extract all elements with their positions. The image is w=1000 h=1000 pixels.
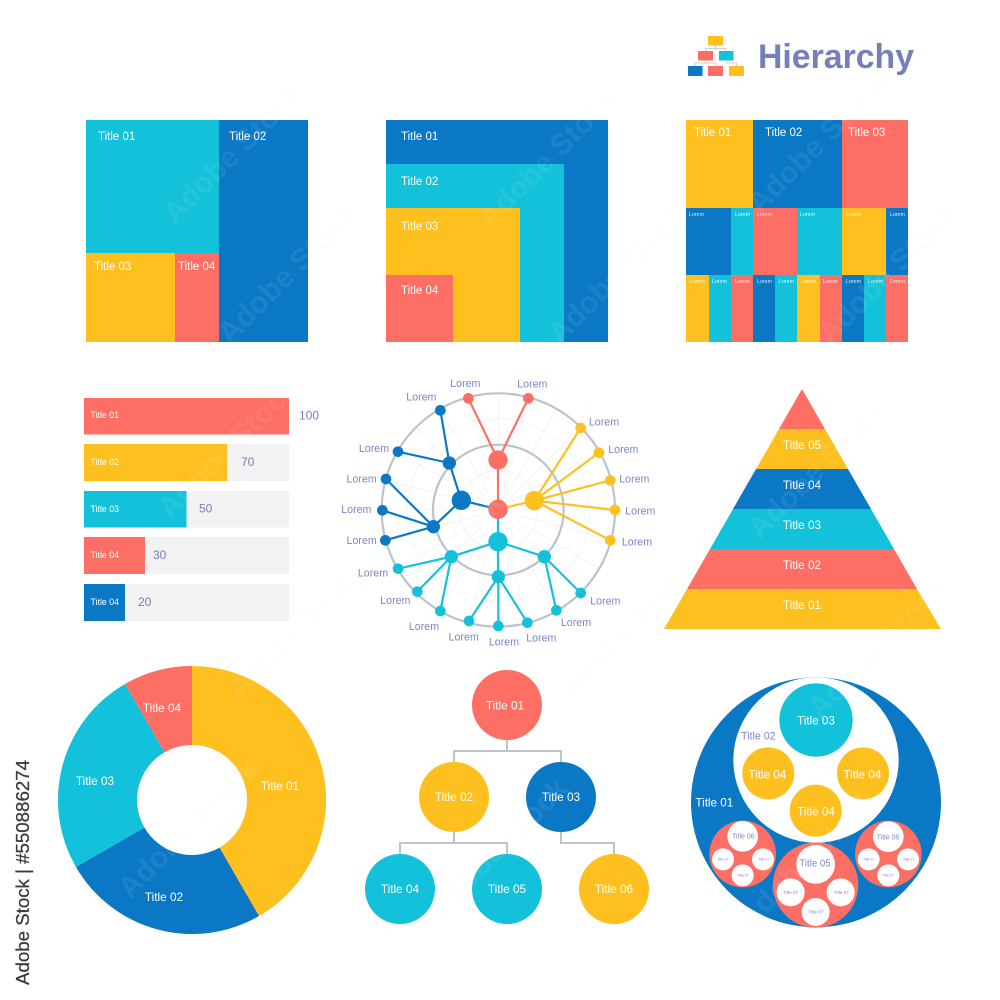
radial labels: Lorem bbox=[590, 596, 621, 608]
panel: nested square treemap: Title 01 bbox=[401, 131, 438, 143]
panel: three-level treemap: Title 03 bbox=[848, 127, 885, 139]
panel: nested square treemap: Title 04 bbox=[401, 285, 439, 297]
radial labels bbox=[341, 378, 656, 648]
pyramid chart: Title 01 bbox=[783, 598, 821, 612]
watermark pattern: Adobe Stock bbox=[472, 82, 625, 235]
circle packing chart: Title 07 bbox=[717, 857, 729, 861]
panel: treemap 1: Title 01 bbox=[98, 131, 135, 143]
root node bbox=[488, 500, 508, 519]
watermark pattern: Adobe Stock bbox=[112, 752, 265, 905]
panel: treemap 1: Title 02 bbox=[229, 131, 266, 143]
watermark pattern: Adobe Stock bbox=[157, 77, 310, 230]
watermark pattern: Adobe Stock bbox=[802, 572, 955, 725]
panel: three-level treemap: Lorem bbox=[823, 279, 839, 285]
circle packing chart: Title 05 bbox=[799, 859, 831, 870]
watermark pattern: Adobe Stock bbox=[452, 392, 605, 545]
circle packing chart: Title 07 bbox=[758, 857, 769, 861]
panel: three-level treemap: Lorem bbox=[712, 279, 728, 285]
radial labels: Lorem bbox=[449, 631, 479, 643]
bar chart: 100 bbox=[299, 408, 319, 422]
panel: nested square treemap bbox=[386, 120, 608, 342]
watermark pattern: Adobe Stock bbox=[552, 552, 705, 705]
panel: three-level treemap: Lorem bbox=[800, 212, 816, 218]
watermark pattern: Adobe Stock bbox=[812, 197, 965, 350]
side credit text: Adobe Stock | #550886274 bbox=[13, 760, 33, 985]
panel: nested square treemap: Title 03 bbox=[401, 221, 438, 233]
bar chart: Title 01 bbox=[90, 410, 119, 420]
radial labels: Lorem bbox=[358, 568, 388, 580]
panel: three-level treemap: Lorem bbox=[735, 212, 751, 218]
circle packing chart: Title 07 bbox=[737, 874, 749, 878]
radial labels: Lorem bbox=[406, 392, 437, 404]
heading text: Hierarchy bbox=[758, 38, 914, 76]
branch: red bbox=[463, 393, 534, 509]
donut chart: Title 03 bbox=[76, 774, 115, 788]
radial labels: Lorem bbox=[619, 473, 650, 485]
circle packing chart: Title 06 bbox=[877, 835, 899, 842]
branch: yellow bbox=[498, 423, 620, 546]
radial labels: Lorem bbox=[347, 473, 377, 485]
circle packing chart: Title 01 bbox=[695, 796, 733, 809]
watermark pattern: Adobe Stock bbox=[152, 372, 305, 525]
tree diagram: Title 05 bbox=[488, 882, 527, 896]
panel: three-level treemap: Lorem bbox=[890, 212, 906, 218]
donut chart: Title 04 bbox=[143, 701, 182, 715]
panel: three-level treemap: Lorem bbox=[846, 279, 862, 285]
pyramid chart: Title 03 bbox=[783, 518, 822, 532]
radial labels: Lorem bbox=[561, 617, 591, 629]
radial labels: Lorem bbox=[608, 444, 639, 456]
watermark pattern: Adobe Stock bbox=[742, 392, 895, 545]
tree diagram: Title 06 bbox=[595, 882, 634, 896]
tree diagram: Title 04 bbox=[381, 882, 420, 896]
circle packing chart: Title 07 bbox=[883, 874, 894, 878]
panel: three-level treemap: Lorem bbox=[757, 279, 773, 285]
bar chart: 70 bbox=[241, 455, 255, 469]
circle packing chart: Title 07 bbox=[808, 909, 824, 914]
panel: three-level treemap: Lorem bbox=[801, 279, 817, 285]
panel: three-level treemap: Lorem bbox=[846, 212, 862, 218]
circle packing chart: Title 06 bbox=[732, 834, 755, 841]
icon: org chart bbox=[688, 36, 744, 76]
tree diagram: Title 02 bbox=[435, 790, 473, 804]
bar chart: Title 02 bbox=[90, 457, 119, 467]
branch: cyan bbox=[393, 509, 586, 631]
pyramid chart bbox=[664, 389, 941, 629]
bar chart: 20 bbox=[138, 595, 152, 609]
donut chart: Title 01 bbox=[261, 779, 299, 793]
radial labels: Lorem bbox=[409, 621, 439, 633]
panel: three-level treemap: Lorem bbox=[757, 212, 773, 218]
bar chart bbox=[84, 398, 319, 621]
panel: three-level treemap: Lorem bbox=[690, 279, 706, 285]
circle packing chart: Title 04 bbox=[797, 805, 835, 818]
radial labels: Lorem bbox=[359, 443, 389, 455]
circle packing chart bbox=[691, 677, 941, 928]
branch: blue bbox=[377, 405, 498, 546]
radial labels: Lorem bbox=[589, 416, 619, 428]
bar chart: 30 bbox=[153, 548, 167, 562]
radial labels: Lorem bbox=[380, 595, 411, 607]
watermark pattern: Adobe Stock bbox=[742, 67, 895, 220]
bar chart: Title 03 bbox=[90, 504, 119, 514]
tree diagram bbox=[365, 670, 649, 924]
radial labels: Lorem bbox=[341, 504, 372, 516]
pyramid chart: Title 02 bbox=[783, 558, 821, 572]
radial labels: Lorem bbox=[622, 537, 652, 549]
panel: treemap 1: Title 03 bbox=[94, 261, 131, 273]
radial labels: Lorem bbox=[625, 505, 656, 517]
radial rings bbox=[382, 393, 615, 627]
panel: three-level treemap: Lorem bbox=[868, 279, 884, 285]
radial labels: Lorem bbox=[517, 379, 548, 391]
circle packing chart: Title 07 bbox=[783, 890, 799, 895]
circle packing chart: Title 04 bbox=[748, 768, 787, 781]
watermark pattern bbox=[112, 67, 965, 935]
bar chart: 50 bbox=[199, 502, 213, 516]
circle packing chart: Title 04 bbox=[843, 768, 882, 781]
circle packing chart: Title 02 bbox=[741, 730, 776, 742]
radial labels: Lorem bbox=[489, 636, 519, 648]
watermark pattern: Adobe Stock bbox=[212, 197, 365, 350]
panel: three-level treemap: Lorem bbox=[689, 212, 705, 218]
panel: nested square treemap: Title 02 bbox=[401, 176, 438, 188]
radial labels: Lorem bbox=[526, 633, 557, 645]
watermark pattern: Adobe Stock bbox=[542, 197, 695, 350]
panel: three-level treemap: Title 02 bbox=[765, 127, 802, 139]
circle packing chart: Title 03 bbox=[797, 714, 835, 727]
panel: three-level treemap: Title 01 bbox=[694, 127, 731, 139]
circle packing chart: Title 07 bbox=[863, 857, 874, 861]
panel: three-level treemap: Lorem bbox=[890, 279, 906, 285]
panel: three-level treemap: Lorem bbox=[735, 279, 751, 285]
pyramid chart: Title 04 bbox=[783, 478, 822, 492]
circle packing chart: Title 07 bbox=[834, 890, 849, 895]
radial grid bbox=[382, 393, 615, 627]
panel: treemap 1: Title 04 bbox=[178, 261, 216, 273]
watermark pattern: Adobe Stock bbox=[422, 772, 575, 925]
watermark pattern: Adobe Stock bbox=[732, 782, 885, 935]
radial labels: Lorem bbox=[347, 535, 377, 547]
bar chart: Title 04 bbox=[90, 597, 119, 607]
circle packing chart: Title 07 bbox=[903, 857, 914, 861]
tree diagram: Title 01 bbox=[486, 698, 524, 712]
tree diagram: Title 03 bbox=[542, 790, 581, 804]
watermark pattern: Adobe Stock bbox=[222, 552, 375, 705]
panel: three-level treemap bbox=[686, 120, 908, 342]
bar chart: Title 04 bbox=[90, 550, 119, 560]
radial tree chart bbox=[341, 378, 656, 648]
donut chart bbox=[58, 666, 326, 934]
logo: hierarchy heading bbox=[688, 36, 914, 76]
radial labels: Lorem bbox=[450, 378, 481, 390]
donut chart: Title 02 bbox=[145, 890, 183, 904]
panel: three-level treemap: Lorem bbox=[779, 279, 795, 285]
panel: treemap 1 bbox=[86, 120, 308, 342]
pyramid chart: Title 05 bbox=[783, 438, 822, 452]
